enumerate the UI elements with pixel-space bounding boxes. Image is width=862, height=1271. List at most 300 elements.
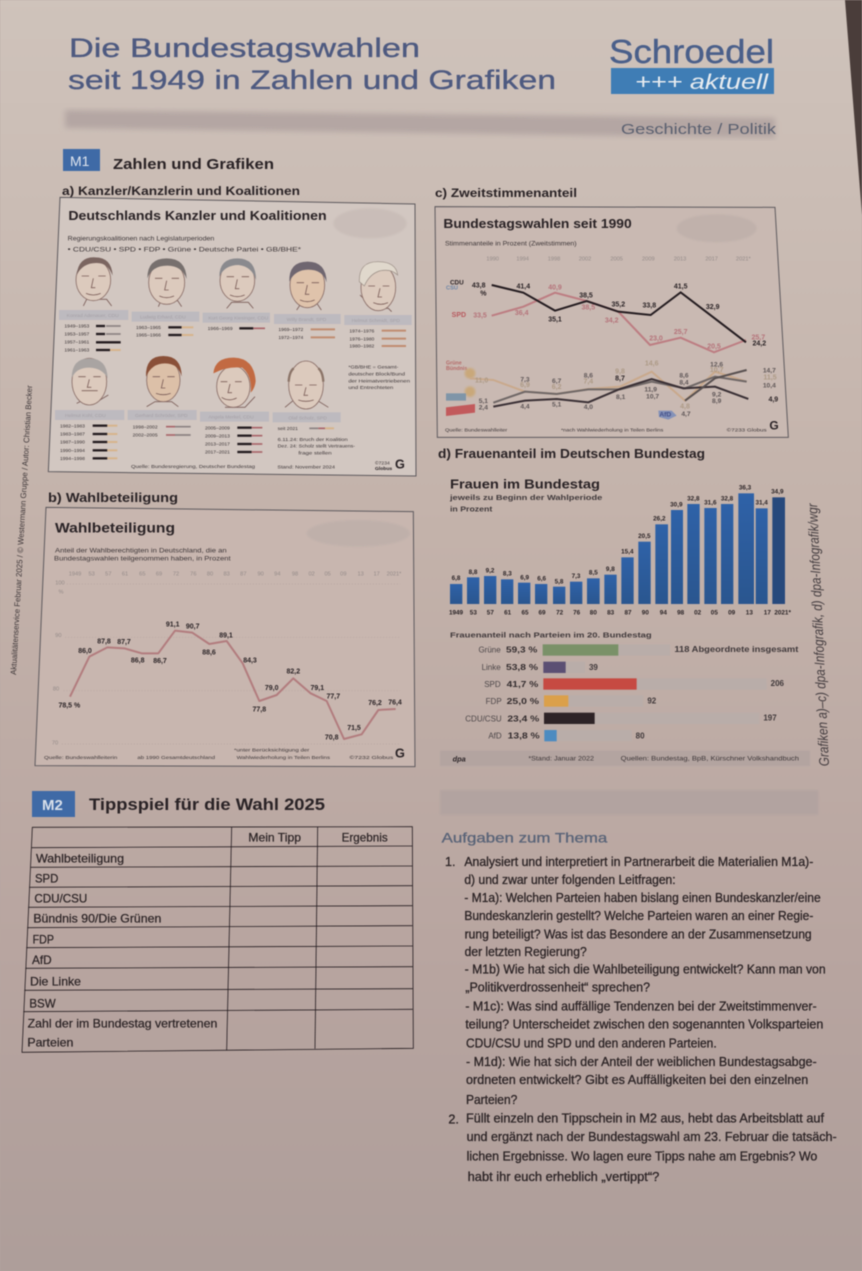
M1 heading: Zahlen und Grafiken	[113, 156, 274, 173]
values small parties: 5,1	[552, 401, 562, 408]
year axis: 2002	[579, 256, 591, 262]
chancellor: Merkel: 2005–2009	[205, 425, 230, 431]
heading c: c) Zweitstimmenanteil	[435, 186, 577, 200]
chancellor: Erhard	[132, 258, 199, 339]
year axis: 2005	[610, 256, 623, 262]
values small parties: 6,7	[552, 378, 562, 385]
year axis b: 2021*	[387, 571, 402, 577]
party bar: AfD: 80	[636, 731, 645, 740]
year axis b: 90	[258, 571, 264, 577]
turnout values: 87,7	[117, 639, 131, 646]
value axis b	[52, 581, 65, 747]
panel d: Frauen im Bundestag	[440, 477, 810, 766]
task 2	[448, 1112, 837, 1184]
turnout values: 76,4	[388, 699, 402, 706]
year axis b: 1949	[69, 571, 81, 577]
values small parties: 8,7	[615, 376, 625, 383]
value axis b: 70	[52, 741, 58, 747]
year axis b: 57	[105, 571, 111, 577]
year axis b: 65	[139, 571, 145, 577]
M2 heading	[32, 791, 325, 817]
values small parties: 4,9	[768, 396, 778, 403]
chancellor: Kiesinger: Kurt Georg Kiesinger, CDU	[208, 316, 269, 322]
table text: FDP	[33, 933, 54, 946]
party bar: FDP: FDP	[486, 697, 502, 706]
party bar: Linke	[482, 662, 598, 673]
source line a: ©7234	[375, 459, 390, 466]
year axis b: 87	[240, 571, 246, 577]
turnout values: 88,6	[202, 649, 216, 656]
task 1: - M1a): Welchen Parteien haben bislang einen Bundeskanzler/eine	[464, 891, 821, 905]
turnout values: 76,2	[368, 700, 382, 707]
values small parties: 4,4	[520, 403, 530, 410]
party bar: AfD: AfD	[488, 732, 502, 741]
chancellor: Adenauer	[59, 257, 128, 354]
bar values: 8,5	[589, 570, 598, 577]
party bar: SPD: 41,7 %	[507, 680, 538, 689]
year axis: 2017	[705, 256, 718, 262]
values small parties: 7,4	[583, 378, 593, 385]
year axis b	[69, 571, 402, 577]
values CDU/CSU: %	[480, 290, 487, 297]
bar values: 8,8	[469, 569, 478, 576]
party bar: Linke: 39	[589, 663, 598, 672]
bar values: 8,3	[503, 570, 512, 577]
source line a: Quelle: Bundesregierung, Deutscher Bundestag	[131, 464, 255, 470]
chancellor: Schmidt: Helmut Schmidt, SPD	[352, 318, 400, 324]
chancellor: Adenauer: 1957–1961	[64, 340, 90, 346]
chancellor: Scholz: frage stellen	[298, 450, 332, 456]
task 2: und ergänzt nach der Bundestagswahl am 23. Februar die tatsäch-	[467, 1130, 837, 1144]
panel a: Kanzler und Koalitionen: Regierungskoalitionen nach Legislaturperioden	[68, 236, 215, 243]
bar years: 83	[607, 610, 615, 617]
turnout values: 77,7	[327, 693, 340, 700]
logo: Schroedel aktuell: +++ aktuell	[635, 71, 770, 94]
party bar: Grüne: 118 Abgeordnete insgesamt	[674, 645, 799, 654]
right credit: Grafiken a)–c) dpa-Infografik, d) dpa-Infografik/wgr	[804, 502, 832, 767]
legend labels: SPD	[452, 312, 466, 319]
panel c: Bundestagswahlen seit 1990	[435, 207, 788, 437]
task 2: habt ihr euch erheblich „vertippt“?	[468, 1170, 659, 1184]
party bar: FDP: 92	[647, 697, 657, 706]
values small parties	[475, 361, 778, 418]
table: Tippspiel	[22, 827, 413, 1052]
party bar: CDU/CSU: 23,4 %	[507, 714, 539, 723]
values CDU/CSU: 41,5	[674, 283, 688, 290]
turnout values: 84,3	[243, 657, 257, 664]
chancellor: Scholz: Dez. 24: Scholz stellt Vertrauens-	[278, 444, 355, 450]
bar years: 98	[677, 610, 685, 617]
year axis b: 13	[358, 571, 364, 577]
panel a: Kanzler und Koalitionen: Deutschlands Kanzler und Koalitionen	[68, 209, 327, 223]
chancellor: Kohl: 1987–1990	[60, 440, 85, 446]
values small parties: 6,2	[552, 384, 562, 391]
chancellor: Schroeder: 1998–2002	[133, 424, 158, 430]
bar years: 53	[470, 610, 477, 617]
values SPD: 34,2	[605, 317, 619, 324]
chancellor: Kohl	[55, 358, 124, 462]
task 1: d) und zwar unter folgenden Leitfragen:	[464, 873, 676, 887]
party bar: FDP	[486, 695, 657, 707]
footnote GB/BHE: und Entrechteten	[348, 385, 394, 391]
bar years: 13	[746, 610, 753, 617]
values CDU/CSU	[472, 282, 766, 348]
values CDU/CSU: 38,5	[579, 292, 593, 299]
year axis b: 94	[274, 571, 280, 577]
task 1: - M1b) Wie hat sich die Wahlbeteiligung entwickelt? Kann man von	[465, 962, 826, 976]
party bar: SPD: 206	[771, 679, 785, 688]
table text: Ergebnis	[342, 831, 388, 844]
bar values: 30,9	[670, 501, 683, 508]
bar values: 15,4	[621, 549, 634, 556]
panel d: Frauen im Bundestag: Frauen im Bundestag	[450, 477, 600, 491]
line: SPD	[492, 293, 746, 352]
bar values: 5,8	[555, 578, 564, 585]
line: CDU/CSU	[492, 285, 746, 342]
year axis b: 83	[224, 571, 230, 577]
values small parties: 8,9	[712, 398, 722, 405]
year axis b: 61	[122, 571, 128, 577]
values small parties: 10,7	[710, 367, 724, 374]
chancellor: Kiesinger: 1966–1969	[208, 326, 233, 332]
footer c: *nach Wahlwiederholung in Teilen Berlins	[561, 427, 664, 433]
values small parties: 8,6	[584, 372, 593, 379]
values small parties: 8,6	[679, 372, 689, 379]
values CDU/CSU: 43,8	[472, 282, 486, 289]
values small parties: 8,1	[616, 394, 626, 401]
heading b: b) Wahlbeteiligung	[48, 490, 178, 505]
footnote GB/BHE: der Heimatvertriebenen	[348, 379, 410, 385]
values small parties: 14,6	[645, 361, 659, 368]
chancellor: Scholz: 6.11.24: Bruch der Koalition	[278, 437, 348, 443]
M1 heading: M1	[70, 153, 90, 169]
chancellor: Scholz: seit 2021	[278, 426, 298, 432]
party bar: FDP: 25,0 %	[507, 697, 539, 706]
title	[68, 33, 556, 95]
chancellor: Merkel: 2017–2021	[205, 450, 230, 456]
dark table edge top right	[845, 0, 862, 215]
values small parties: 10,4	[763, 382, 776, 389]
bar values: 26,2	[653, 516, 666, 523]
value axis b: %	[58, 589, 64, 595]
footer b: *unter Berücksichtigung der	[234, 748, 310, 754]
year axis b: 17	[374, 571, 380, 577]
values small parties: 8,4	[679, 380, 689, 387]
bar values: 20,5	[638, 533, 651, 540]
turnout values: 79,0	[265, 685, 279, 692]
table text: BSW	[29, 998, 56, 1011]
party bar: SPD: SPD	[484, 680, 501, 689]
bar years: 61	[504, 610, 512, 617]
value axis b: 100	[55, 581, 65, 587]
values small parties: 4,0	[584, 404, 593, 411]
footer c: G	[769, 418, 779, 432]
chancellor: Erhard: 1965–1966	[136, 333, 161, 339]
chancellor: Kohl: 1990–1994	[60, 448, 85, 454]
task 1: Bundeskanzlerin gestellt? Welche Parteien waren an einer Regie-	[464, 909, 813, 923]
values SPD: 25,7	[674, 329, 688, 336]
party bar: AfD: 13,8 %	[508, 732, 540, 741]
chancellor: Merkel	[200, 358, 269, 456]
party bar: SPD	[484, 678, 785, 690]
chancellor: Brandt: 1972–1974	[278, 335, 304, 341]
bar values: 6,9	[520, 574, 530, 581]
footer c: ©7233 Globus	[727, 427, 767, 434]
chancellor: Adenauer: 1961–1963	[64, 348, 90, 354]
panel d: Frauen im Bundestag: jeweils zu Beginn der Wahlperiode	[449, 495, 602, 502]
chancellor: Schroeder: Gerhard Schröder, SPD	[135, 413, 188, 419]
task 1: Parteien?	[466, 1093, 517, 1107]
chancellor: Erhard: 1963–1965	[136, 325, 161, 331]
turnout values: 90,7	[186, 623, 200, 630]
subject label: Geschichte / Politik	[621, 121, 777, 138]
bar values: 31,4	[755, 500, 768, 507]
line: AfD	[685, 370, 747, 401]
year axis b: 53	[89, 571, 95, 577]
legend labels: Grüne	[446, 361, 462, 367]
M2 heading: Tippspiel für die Wahl 2025	[89, 795, 325, 814]
chancellor: Schmidt	[344, 262, 412, 350]
task 1: „Politikverdrossenheit“ sprechen?	[465, 981, 650, 995]
chancellor: Brandt: 1969–1972	[278, 327, 304, 333]
chancellor: Merkel: 2013–2017	[205, 442, 230, 448]
panel d: Frauen im Bundestag: in Prozent	[450, 507, 493, 514]
footnote GB/BHE: *GB/BHE = Gesamt-	[348, 364, 399, 370]
turnout values: 78,5 %	[58, 702, 81, 709]
bar values: 32,8	[687, 495, 700, 502]
title: seit 1949 in Zahlen und Grafiken	[68, 65, 556, 95]
panel a: Kanzler und Koalitionen: • CDU/CSU • SPD • FDP • Grüne • Deutsche Partei • GB/BHE*	[68, 246, 302, 253]
year axis: 2021*	[736, 256, 752, 262]
table text: Zahl der im Bundestag vertretenen	[28, 1018, 217, 1031]
footer c: Quelle: Bundeswahlleiter	[445, 427, 508, 433]
task 2: Füllt einzeln den Tippschein in M2 aus, hebt das Arbeitsblatt auf	[466, 1112, 824, 1126]
party bar: Grüne: Grüne	[478, 646, 501, 655]
M1 heading	[63, 149, 274, 173]
panel b: Wahlbeteiligung: Wahlbeteiligung	[55, 520, 175, 536]
values small parties: 7,3	[520, 376, 530, 383]
party bar: Grüne: 59,3 %	[506, 646, 537, 655]
values small parties: 9,2	[712, 391, 722, 398]
year axis: 1990	[486, 256, 499, 262]
turnout values: 87,8	[97, 638, 111, 645]
footer c	[445, 418, 779, 434]
values SPD: 25,7	[752, 335, 765, 342]
party bar: AfD	[488, 730, 645, 741]
footer b	[44, 746, 405, 761]
chancellor: Schroeder: 2002–2005	[133, 433, 158, 439]
values CDU/CSU: 41,4	[517, 283, 530, 290]
line: Linke	[493, 379, 748, 407]
chancellor: Merkel: 2009–2013	[205, 433, 230, 439]
chancellor: Schmidt: 1980–1982	[349, 344, 375, 350]
year axis b: 05	[325, 571, 331, 577]
footer b: Wahlwiederholung in Teilen Berlins	[237, 755, 331, 761]
values small parties: 6,9	[520, 382, 530, 389]
bar values: 6,6	[537, 576, 547, 583]
party bar: CDU/CSU	[465, 713, 777, 724]
bar years: 80	[590, 610, 597, 617]
subtitle: Anteil der Wahlberechtigten in Deutschland, die an	[55, 548, 227, 554]
values SPD: 20,5	[707, 343, 721, 350]
task 1: Analysiert und interpretiert in Partnerarbeit die Materialien M1a)-	[464, 855, 813, 869]
chancellor: Scholz: Olaf Scholz, SPD	[288, 415, 327, 421]
year axis: 1994	[516, 256, 529, 262]
values SPD	[473, 285, 765, 350]
subtitle	[54, 548, 231, 563]
source line a: Globus	[375, 466, 392, 472]
bar years: 76	[573, 610, 581, 617]
panel b: Wahlbeteiligung	[35, 507, 415, 767]
bar years: 72	[556, 610, 564, 617]
bar values: 36,3	[739, 485, 752, 492]
chancellor: Schroeder	[128, 356, 197, 439]
line: grey small party	[493, 377, 747, 403]
grid	[62, 584, 400, 744]
logo: Schroedel aktuell: Schroedel	[609, 33, 774, 70]
logo: Schroedel aktuell	[609, 33, 774, 94]
year axis b: 72	[173, 571, 179, 577]
year axis: 2013	[674, 256, 686, 262]
task 2: 2.	[448, 1112, 459, 1126]
bar years: 57	[487, 610, 494, 617]
legend labels: CDU	[450, 280, 464, 287]
task 1: teilung? Unterscheidet zwischen den sogenannten Volksparteien	[465, 1017, 823, 1031]
left credit: Aktualitätenservice Februar 2025 / © Westermann Gruppe / Autor: Christian Becker	[9, 385, 34, 675]
table text: SPD	[35, 872, 58, 885]
table text: Wahlbeteiligung	[36, 852, 124, 865]
values small parties: 4,8	[680, 403, 690, 410]
turnout values: 86,8	[131, 657, 145, 664]
footnote GB/BHE	[348, 364, 410, 391]
bar years: 02	[694, 610, 702, 617]
bar years: 69	[538, 610, 546, 617]
legend labels: AfD	[659, 412, 671, 419]
bar years: 17	[764, 610, 771, 617]
bar years: 94	[660, 610, 667, 617]
values small parties: 14,7	[763, 367, 776, 374]
M2 heading: M2	[42, 797, 63, 814]
bar years: 1949	[449, 610, 464, 617]
year axis b: 09	[340, 571, 346, 577]
table text: Die Linke	[30, 975, 81, 988]
footer d	[440, 751, 810, 766]
footer d: *Stand: Januar 2022	[528, 756, 595, 763]
chancellor: Kohl: 1982–1983	[60, 423, 85, 429]
values CDU/CSU: 32,9	[706, 304, 720, 311]
tasks heading: Aufgaben zum Thema	[442, 830, 608, 846]
panel a: Kanzler und Koalitionen	[48, 197, 416, 476]
bar chart women by year	[450, 493, 785, 604]
chancellor: Schmidt: 1976–1980	[349, 336, 375, 342]
footer b: ab 1990 Gesamtdeutschland	[137, 755, 215, 761]
heading d: d) Frauenanteil im Deutschen Bundestag	[438, 446, 705, 461]
task 1: der letzten Regierung?	[465, 945, 587, 959]
values SPD: 40,9	[548, 285, 562, 292]
bar values: 9,8	[606, 566, 615, 573]
values CDU/CSU: 35,1	[548, 316, 562, 323]
legend labels: CSU	[446, 285, 458, 291]
year axis: 2009	[642, 256, 655, 262]
bar years: 90	[642, 610, 649, 617]
value axis b: 90	[55, 633, 61, 639]
chancellor: Merkel: Angela Merkel, CDU	[208, 415, 254, 421]
year axis b: 69	[156, 571, 162, 577]
value axis b: 80	[53, 686, 59, 692]
panel c: Bundestagswahlen seit 1990: Stimmenanteile in Prozent (Zweitstimmen)	[445, 242, 577, 248]
chancellor: Erhard: Ludwig Erhard, CDU	[140, 315, 186, 321]
right column: tasks	[440, 790, 837, 1184]
year axis b: 76	[190, 571, 196, 577]
footer b: G	[395, 746, 405, 760]
values small parties: 4,7	[681, 411, 691, 418]
values small parties: 5,1	[479, 398, 488, 405]
table text: CDU/CSU	[34, 893, 87, 906]
chancellor: Adenauer: 1953–1957	[64, 332, 90, 338]
chancellor: Adenauer: 1949–1953	[64, 324, 90, 330]
bar values: 9,2	[486, 568, 495, 575]
task 1: rung beteiligt? Was ist das Besondere an der Zusammensetzung	[465, 927, 812, 941]
turnout values: 71,5	[347, 725, 361, 732]
year axis	[486, 256, 752, 262]
bar years: 05	[711, 610, 718, 617]
bar years: 2021*	[774, 610, 791, 617]
line chart turnout	[70, 631, 396, 739]
values SPD: 23,0	[649, 336, 663, 343]
party chart heading: Frauenanteil nach Parteien im 20. Bundestag	[450, 631, 652, 640]
table text: Parteien	[27, 1037, 73, 1050]
values CDU/CSU: 35,2	[612, 302, 625, 309]
table text: Bündnis 90/Die Grünen	[33, 913, 161, 926]
chancellor: Schmidt: 1974–1976	[349, 328, 375, 334]
year axis b: 02	[309, 571, 315, 577]
chancellor: Kiesinger	[203, 258, 270, 332]
footer b: Quelle: Bundeswahlleiterin	[44, 755, 118, 761]
task 1: 1.	[445, 855, 456, 869]
values small parties: 10,7	[646, 393, 659, 400]
chancellor: Brandt	[274, 262, 341, 341]
bar values: 32,8	[721, 495, 734, 502]
turnout values: 91,1	[166, 621, 180, 628]
values SPD: 33,5	[473, 312, 487, 319]
turnout values: 89,1	[219, 632, 233, 639]
values small parties: 11,9	[644, 386, 657, 393]
table text: AfD	[32, 954, 52, 967]
table text	[27, 831, 388, 1050]
values CDU/CSU: 33,8	[643, 302, 656, 309]
footer d: Quellen: Bundestag, BpB, Kürschner Volkshandbuch	[621, 755, 800, 762]
party bar: Grüne	[478, 644, 799, 656]
values SPD: 38,5	[582, 305, 595, 312]
bar values: 34,9	[771, 489, 784, 496]
bar years: 65	[521, 610, 529, 617]
bar years: 09	[728, 610, 736, 617]
chancellor: Scholz	[273, 361, 355, 456]
footnote GB/BHE: deutscher Block/Bund	[348, 372, 405, 378]
values CDU/CSU: 24,2	[753, 341, 766, 348]
bar values	[452, 485, 784, 585]
blurred header bar	[65, 110, 775, 138]
chancellor: Adenauer: Konrad Adenauer, CDU	[67, 313, 119, 319]
bar values: 31,6	[704, 499, 717, 506]
legend labels: Bündnis	[446, 366, 467, 372]
chancellor: Kohl: 1994–1998	[60, 456, 85, 462]
task 1: - M1d): Wie hat sich der Anteil der weiblichen Bundestagsabge-	[466, 1055, 817, 1069]
chancellor: Kohl: 1983–1987	[60, 432, 85, 438]
values small parties: 11,5	[763, 375, 777, 382]
turnout values: 79,1	[311, 685, 324, 692]
values small parties: 12,6	[710, 361, 723, 368]
